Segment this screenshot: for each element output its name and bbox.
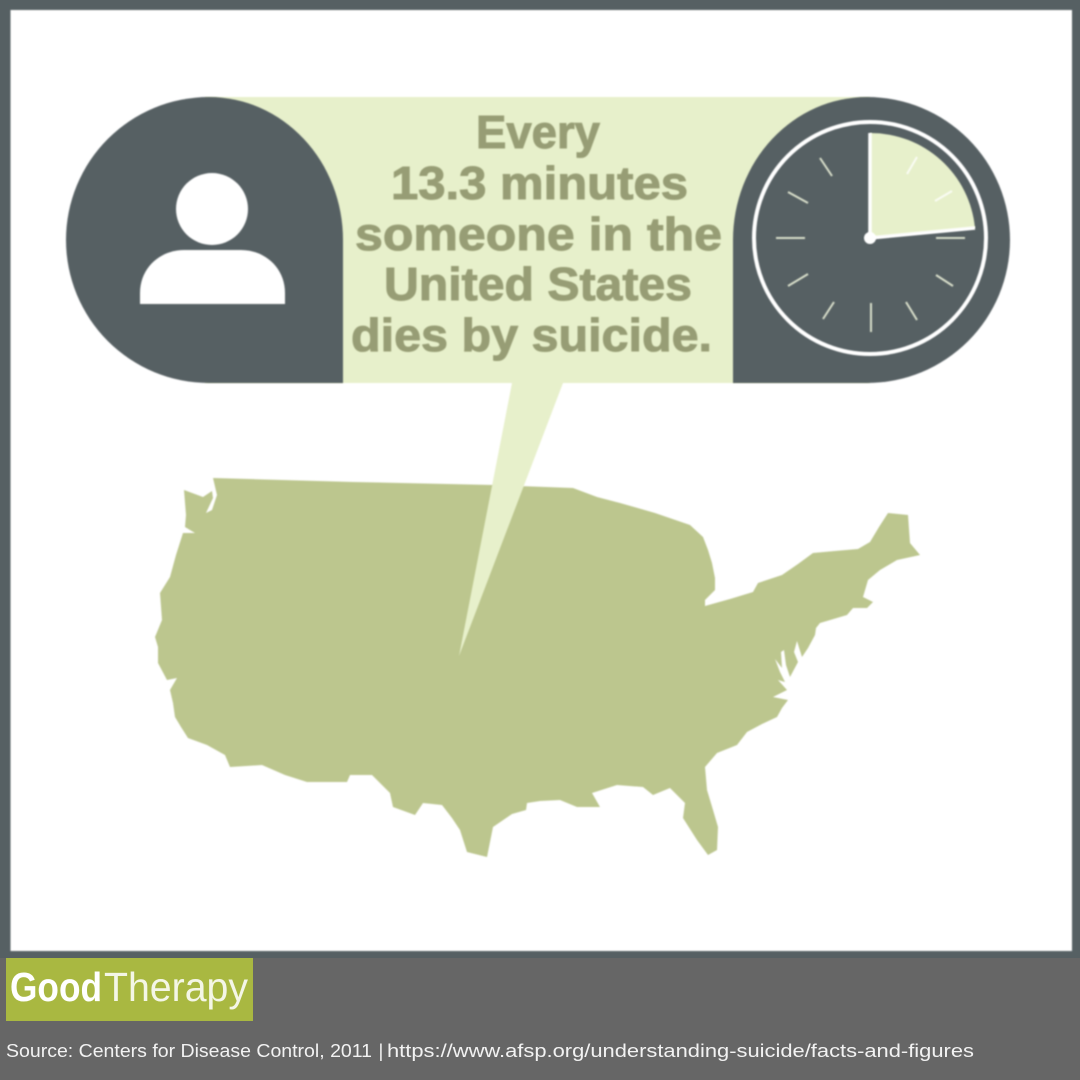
source line: Source: Centers for Disease Control, 2011 bbox=[6, 1040, 372, 1061]
headline text: someone in the bbox=[355, 208, 722, 260]
headline text: United States bbox=[384, 258, 692, 310]
headline text: Every bbox=[476, 106, 600, 158]
headline text bbox=[351, 106, 722, 361]
source line bbox=[6, 1040, 974, 1061]
headline text: 13.3 minutes bbox=[391, 157, 688, 209]
speech bubble background with tail bbox=[205, 97, 870, 656]
icon: clock bbox=[754, 122, 986, 354]
panel: person badge bbox=[66, 97, 343, 383]
source line: https://www.afsp.org/understanding-suicide/facts-and-figures bbox=[387, 1040, 974, 1061]
source line: | bbox=[378, 1040, 383, 1061]
logo: GoodTherapy bbox=[6, 958, 253, 1021]
logo: GoodTherapy: Therapy bbox=[104, 964, 248, 1010]
icon: person bbox=[140, 173, 285, 304]
headline text: dies by suicide. bbox=[351, 309, 712, 361]
logo: GoodTherapy: Good bbox=[10, 964, 102, 1010]
panel: clock badge bbox=[733, 97, 1010, 383]
map of the United States bbox=[155, 478, 920, 857]
